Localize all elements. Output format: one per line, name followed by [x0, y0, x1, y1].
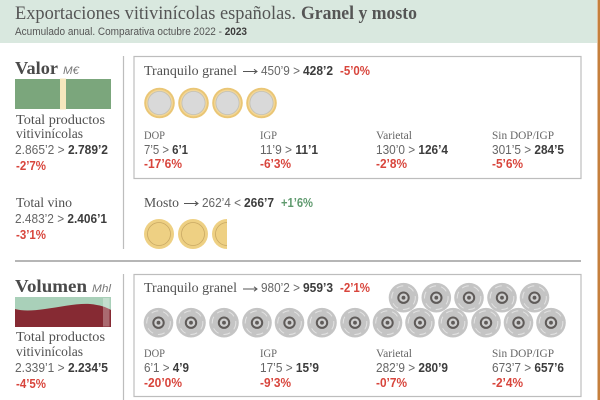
- text: total productos vitivinícolas: vitivinícolas: [16, 345, 83, 360]
- text: total vino: [15, 196, 107, 242]
- column: Varietal: -2’8%: [376, 157, 407, 171]
- headline: tranquilo granel: -2’1%: [340, 281, 370, 295]
- headline: tranquilo granel: [144, 281, 370, 296]
- column: IGP: [260, 348, 319, 390]
- heading: Volumen: Mhl: [92, 283, 112, 295]
- right edge strip: [598, 0, 600, 400]
- column: Varietal: 130’0 > 126’4: [376, 143, 448, 157]
- icon: coins: [144, 88, 277, 118]
- column: Varietal: Varietal: [376, 348, 412, 360]
- column: Sin DOP/IGP: [492, 130, 564, 171]
- column: DOP: DOP: [144, 348, 165, 360]
- headline: tranquilo granel: [144, 64, 370, 79]
- column: Varietal: [376, 348, 448, 390]
- title: Exportaciones vitivinícolas españolas.: [15, 3, 296, 24]
- column: Sin DOP/IGP: Sin DOP/IGP: [492, 130, 554, 142]
- column: Sin DOP/IGP: 301’5 > 284’5: [492, 143, 564, 157]
- panel: tranquilo granel volumen: [134, 274, 581, 396]
- headline: tranquilo granel: 959’3: [303, 281, 333, 295]
- column: Varietal: [376, 130, 448, 171]
- heading: Valor: Valor: [15, 58, 58, 78]
- column: Sin DOP/IGP: 673’7 > 657’6: [492, 361, 564, 375]
- column: Varietal: -0’7%: [376, 376, 407, 390]
- column: Varietal: 282’9 > 280’9: [376, 361, 448, 375]
- column: DOP: -20’0%: [144, 376, 182, 390]
- column: IGP: 11’9 > 11’1: [260, 143, 318, 157]
- text: total productos vitivinícolas: [15, 330, 108, 391]
- headline: mosto: 262’4 <: [202, 196, 241, 210]
- column: IGP: -6’3%: [260, 157, 291, 171]
- headline: tranquilo granel: 450’9 >: [261, 64, 300, 78]
- text: total productos vitivinícolas: Total productos: [16, 113, 105, 128]
- text: total vino: 2.483’2 > 2.406’1: [15, 212, 107, 226]
- column: DOP: 6’1 > 4’9: [144, 361, 189, 375]
- text: total productos vitivinícolas: -4’5%: [16, 377, 46, 391]
- column: IGP: [260, 130, 318, 171]
- text: total productos vitivinícolas: Total productos: [16, 330, 105, 345]
- headline: tranquilo granel: -5’0%: [340, 64, 370, 78]
- panel: tranquilo granel valor: [134, 56, 581, 178]
- text: total productos vitivinícolas: [15, 113, 108, 173]
- column: Sin DOP/IGP: -2’4%: [492, 376, 523, 390]
- headline: mosto: +1’6%: [281, 196, 313, 210]
- headline: mosto: 266’7: [244, 196, 274, 210]
- column: IGP: IGP: [260, 348, 277, 360]
- column: Sin DOP/IGP: [492, 348, 564, 390]
- text: total productos vitivinícolas: vitivinícolas: [16, 127, 83, 142]
- headline: tranquilo granel: 980’2 >: [261, 281, 300, 295]
- headline: tranquilo granel: Tranquilo granel: [144, 64, 237, 79]
- panel: volumen summary: [15, 276, 112, 391]
- text: total productos vitivinícolas: -2’7%: [16, 159, 46, 173]
- column: IGP: 17’5 > 15’9: [260, 361, 319, 375]
- subtitle: Acumulado anual. Comparativa octubre 2022 - 2023: [15, 26, 247, 38]
- headline: tranquilo granel: Tranquilo granel: [144, 281, 237, 296]
- heading: Valor: M€: [63, 65, 80, 77]
- column: Sin DOP/IGP: Sin DOP/IGP: [492, 348, 554, 360]
- column: DOP: -17’6%: [144, 157, 182, 171]
- column: DOP: 7’5 > 6’1: [144, 143, 188, 157]
- heading: Volumen: Volumen: [15, 276, 87, 296]
- column: DOP: DOP: [144, 130, 165, 142]
- column: Sin DOP/IGP: -5’6%: [492, 157, 523, 171]
- panel: mosto: [144, 196, 313, 249]
- column: DOP: [144, 130, 188, 171]
- heading: Valor: [15, 58, 80, 78]
- title: Granel y mosto: [301, 3, 417, 24]
- header band: [0, 0, 597, 43]
- column: IGP: IGP: [260, 130, 277, 142]
- text: total productos vitivinícolas: 2.865’2 > 2.789’2: [15, 143, 108, 157]
- headline: mosto: [144, 196, 313, 211]
- text: total vino: -3’1%: [16, 228, 46, 242]
- headline: mosto: Mosto: [144, 196, 179, 211]
- icon: must coins: [144, 219, 227, 249]
- icon: discs: [144, 283, 566, 338]
- chart: valor bar: [15, 78, 111, 110]
- headline: tranquilo granel: 428’2: [303, 64, 333, 78]
- column: DOP: [144, 348, 189, 390]
- text: total productos vitivinícolas: 2.339’1 > 2.234’5: [15, 361, 108, 375]
- chart: volumen wave: [15, 297, 111, 327]
- column: Varietal: Varietal: [376, 130, 412, 142]
- panel: valor summary: [15, 58, 111, 242]
- text: total vino: Total vino: [16, 196, 72, 211]
- column: IGP: -9’3%: [260, 376, 291, 390]
